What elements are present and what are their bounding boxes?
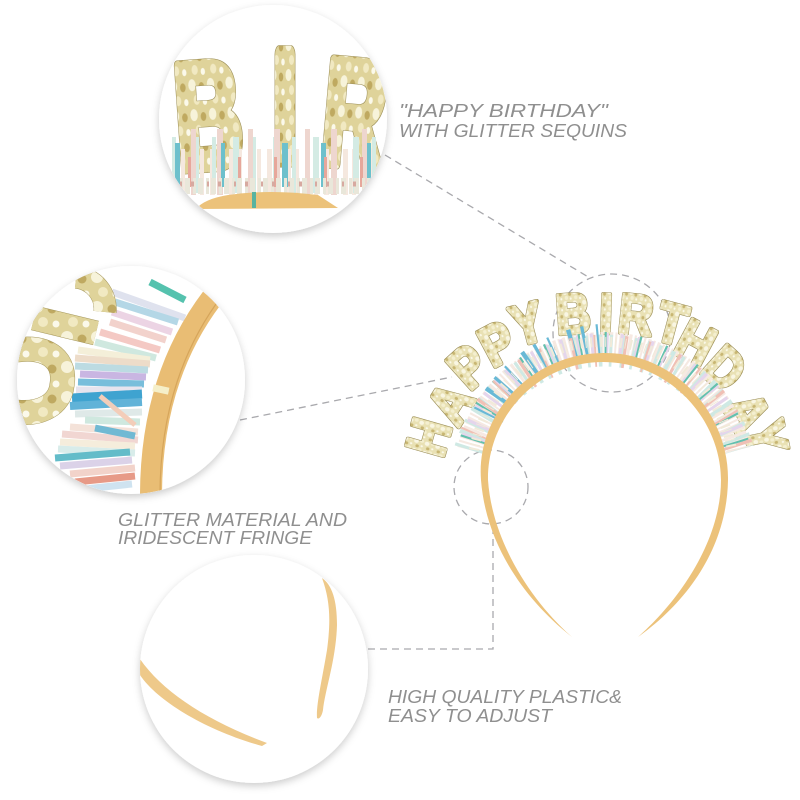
caption: fringe: [118, 510, 347, 548]
detail circle: band tips: [138, 555, 368, 783]
enlarged fringe strips: [55, 282, 185, 490]
glitter letters: HAPPY BIRTHDAY: Y: [504, 290, 551, 359]
right band tip: [317, 578, 337, 719]
glitter letters: HAPPY BIRTHDAY: [395, 282, 799, 463]
enlarged band: [151, 298, 212, 500]
caption: plastic: EASY TO ADJUST: [388, 706, 554, 726]
enlarged glitter letters BIR: [174, 45, 386, 174]
dashed highlight circle: letters: [553, 274, 671, 392]
detail circle: fringe: [16, 266, 245, 500]
leader line: sequins: [385, 155, 590, 278]
caption: sequins: [399, 101, 627, 141]
glitter letters: HAPPY BIRTHDAY: I: [598, 283, 614, 346]
glitter letters: HAPPY BIRTHDAY: P: [436, 333, 502, 401]
caption: plastic: HIGH QUALITY PLASTIC&: [388, 687, 622, 707]
glitter letters: HAPPY BIRTHDAY: H: [665, 308, 725, 379]
caption: plastic: [388, 687, 622, 726]
glitter letters: HAPPY BIRTHDAY: A: [711, 383, 782, 443]
glitter letters: HAPPY BIRTHDAY: D: [690, 335, 758, 404]
glitter letters: HAPPY BIRTHDAY: P: [469, 309, 526, 380]
caption: sequins: WITH GLITTER SEQUINS: [399, 121, 627, 141]
glitter letters: HAPPY BIRTHDAY: R: [615, 283, 656, 349]
glitter letters: HAPPY BIRTHDAY: A: [416, 373, 487, 435]
glitter letters: HAPPY BIRTHDAY: B: [554, 282, 592, 347]
iridescent fringe: [470, 340, 738, 450]
leader line: fringe: [240, 377, 452, 420]
caption: fringe: GLITTER MATERIAL AND: [118, 510, 347, 530]
enlarged glitter letters BIR: B: [169, 30, 248, 202]
leader line: plastic band: [368, 523, 493, 649]
caption: sequins: "HAPPY BIRTHDAY": [399, 101, 610, 121]
enlarged glitter letters: [16, 277, 105, 413]
dashed highlight circle: band: [454, 450, 528, 524]
enlarged glitter letters BIR: I: [275, 24, 295, 191]
glitter letters: HAPPY BIRTHDAY: T: [649, 291, 694, 359]
gold band: [481, 353, 728, 637]
glitter letters: HAPPY BIRTHDAY: H: [395, 412, 464, 463]
enlarged fringe: [172, 162, 380, 186]
glitter letters: HAPPY BIRTHDAY: Y: [731, 415, 799, 459]
caption: fringe: IRIDESCENT FRINGE: [118, 528, 313, 548]
detail circle: sequin letters: [159, 5, 393, 233]
enlarged glitter letters BIR: R: [316, 27, 393, 199]
enlarged band: [196, 192, 338, 209]
band teal stitch: [252, 192, 256, 208]
headband product: [395, 282, 799, 637]
left band tip: [138, 656, 267, 746]
